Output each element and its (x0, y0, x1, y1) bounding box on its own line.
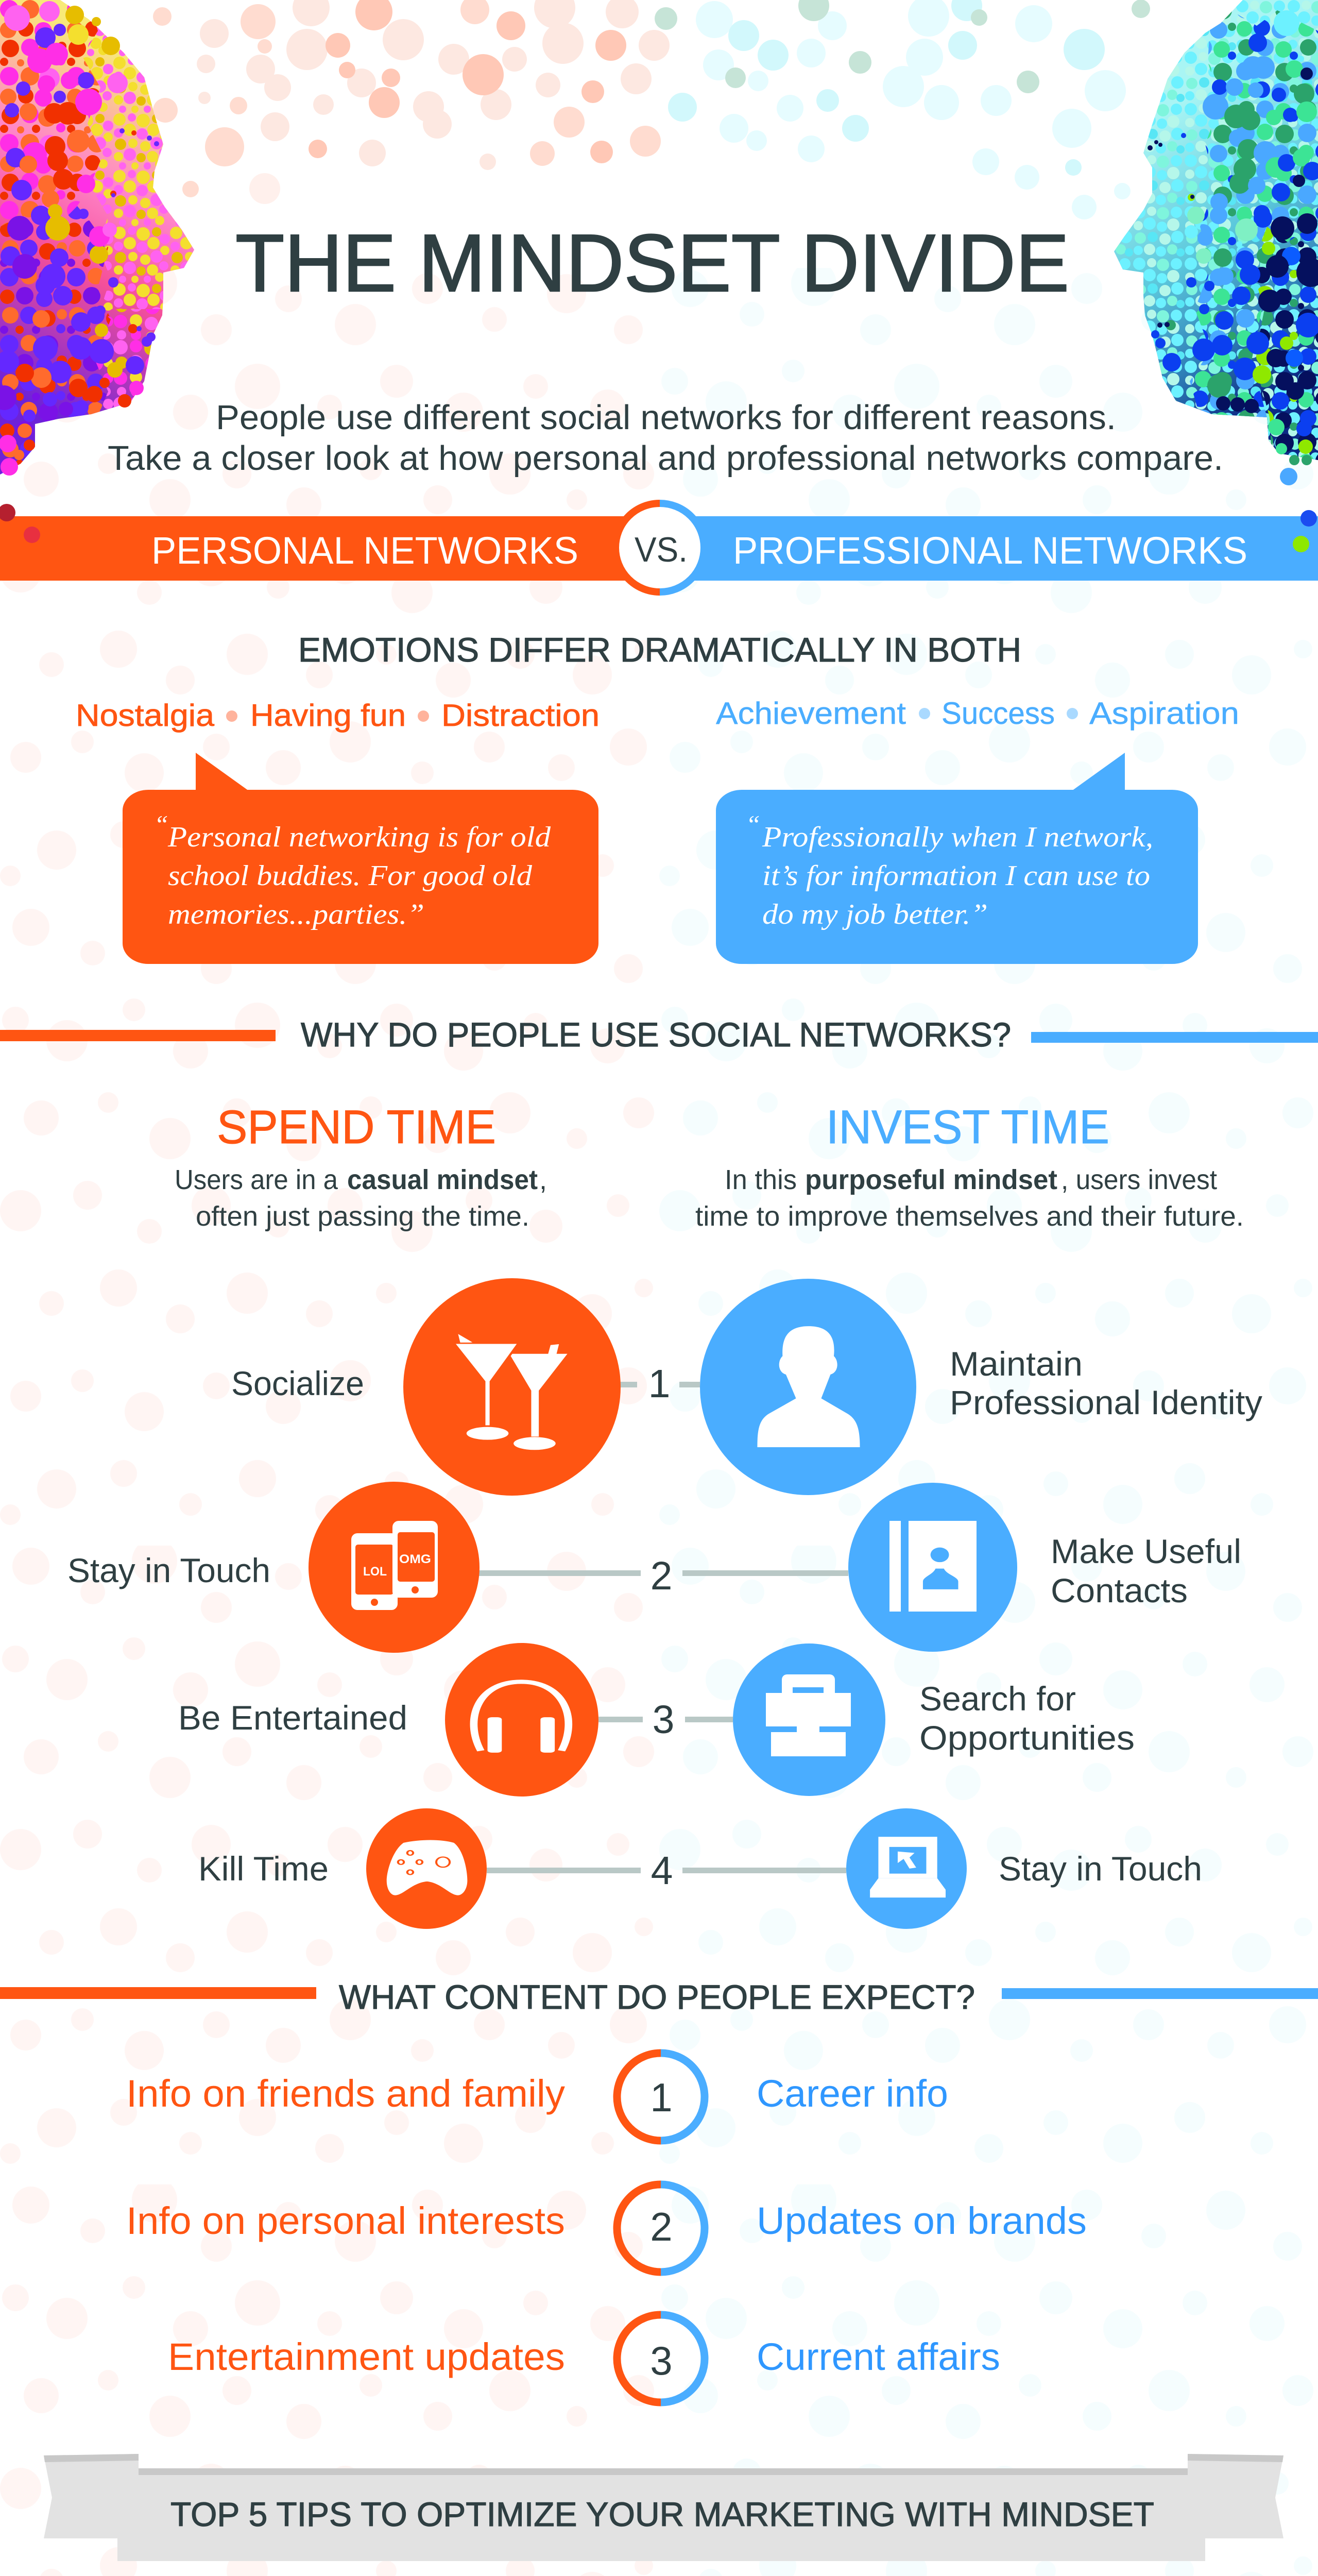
section heading: what content do people expect (0, 1978, 1318, 2016)
invest time description (695, 1164, 1244, 1232)
intro text: People use different social networks for different reasons. (216, 398, 1116, 437)
speech bubble: professional quote: it’s for information I can use to (762, 860, 1150, 892)
row 1: socialize vs professional identity: Professional Identity (950, 1383, 1262, 1421)
content row 2: Info on personal interests (126, 2199, 565, 2242)
row 4: kill time vs stay in touch: 4 (651, 1849, 673, 1893)
row 4: kill time vs stay in touch: Stay in Touch (999, 1850, 1202, 1888)
spend time description: , (539, 1164, 547, 1195)
row 3: be entertained vs search for opportunities: Search for (919, 1680, 1076, 1718)
row 1: socialize vs professional identity: Socialize (231, 1364, 364, 1402)
section heading: why do people use social networks: WHY DO PEOPLE USE SOCIAL NETWORKS? (301, 1015, 1011, 1054)
icon: cocktail glasses (454, 1334, 568, 1450)
row 3: be entertained vs search for opportunities: 3 (653, 1698, 674, 1742)
row 3: be entertained vs search for opportunities (178, 1643, 1135, 1797)
invest time heading: INVEST TIME (826, 1101, 1109, 1154)
top dots: personal side (153, 0, 670, 204)
row 4: kill time vs stay in touch (198, 1808, 1202, 1929)
content row 3 (168, 2315, 1000, 2402)
speech bubble: personal quote: “ (154, 810, 168, 839)
content row 1 (126, 2053, 948, 2141)
content row 2 (126, 2184, 1087, 2272)
professional emotions list (716, 696, 1239, 731)
spend time description (175, 1164, 547, 1232)
section heading: what content do people expect: WHAT CONTENT DO PEOPLE EXPECT? (339, 1978, 975, 2016)
content row 3: Current affairs (757, 2335, 1000, 2378)
title: THE MINDSET DIVIDE (235, 218, 1069, 309)
row 2: stay in touch vs useful contacts: 2 (651, 1554, 672, 1598)
icon: briefcase (766, 1674, 851, 1756)
content row 1: Career info (757, 2072, 948, 2115)
row 1: socialize vs professional identity (231, 1278, 1262, 1496)
professional emotions list: Aspiration (1089, 696, 1239, 731)
icon: laptop (870, 1837, 946, 1897)
intro text (108, 398, 1223, 478)
professional emotions list: Achievement (716, 696, 906, 731)
spend time description: casual mindset (347, 1164, 538, 1195)
speech bubble: personal quote (123, 753, 598, 964)
invest time description: , users invest (1061, 1164, 1217, 1195)
speech bubble: personal quote: memories...parties.” (168, 899, 424, 930)
content row 1: 1 (650, 2075, 673, 2120)
emotions heading: EMOTIONS DIFFER DRAMATICALLY IN BOTH (298, 631, 1021, 669)
content row 3: 3 (650, 2338, 673, 2383)
personal emotions list: Distraction (441, 698, 600, 733)
row 1: socialize vs professional identity: Maintain (950, 1345, 1083, 1383)
right head made of cool dots (1107, 0, 1318, 485)
row 3: be entertained vs search for opportunities: Be Entertained (178, 1699, 407, 1737)
ribbon: top 5 tips heading: TOP 5 TIPS TO OPTIMIZE YOUR MARKETING WITH MINDSET (170, 2495, 1154, 2533)
row 1: socialize vs professional identity: 1 (648, 1362, 670, 1406)
speech bubble: personal quote: Personal networking is for old (167, 821, 551, 853)
row 4: kill time vs stay in touch: Kill Time (198, 1850, 329, 1888)
versus banner (0, 503, 1318, 592)
content row 1: Info on friends and family (126, 2072, 565, 2115)
icon: phones: OMG (399, 1552, 431, 1566)
icon: contact book (889, 1521, 977, 1612)
row 2: stay in touch vs useful contacts: Contacts (1051, 1571, 1188, 1609)
speech bubble: professional quote: Professionally when I network, (762, 821, 1153, 853)
content row 2: Updates on brands (757, 2199, 1087, 2242)
professional emotions list: Success (942, 696, 1055, 731)
spend time description: often just passing the time. (196, 1201, 529, 1232)
content row 3: Entertainment updates (168, 2335, 565, 2378)
icon: phones (351, 1521, 438, 1610)
spend time description: Users are in a (175, 1164, 338, 1195)
left head made of warm dots (0, 0, 194, 476)
icon: person silhouette (757, 1326, 860, 1447)
row 3: be entertained vs search for opportunities: Opportunities (919, 1719, 1135, 1757)
row 2: stay in touch vs useful contacts: Make Useful (1051, 1532, 1241, 1570)
icon: headphones (474, 1682, 569, 1753)
speech bubble: professional quote: do my job better.” (762, 899, 988, 930)
speech bubble: professional quote: “ (746, 810, 760, 839)
icon: game controller (387, 1840, 467, 1895)
speech bubble: personal quote: school buddies. For good old (168, 860, 533, 892)
row 2: stay in touch vs useful contacts (67, 1482, 1241, 1653)
invest time description: time to improve themselves and their future. (695, 1201, 1244, 1232)
content row 2: 2 (650, 2204, 673, 2249)
invest time description: purposeful mindset (805, 1164, 1057, 1195)
ribbon: top 5 tips heading (44, 2454, 1283, 2561)
intro text: Take a closer look at how personal and professional networks compare. (108, 439, 1223, 478)
versus banner: PERSONAL NETWORKS (151, 529, 578, 572)
speech bubble: professional quote (716, 753, 1198, 964)
row 2: stay in touch vs useful contacts: Stay in Touch (67, 1551, 270, 1589)
icon: phones: LOL (363, 1565, 387, 1579)
spend time heading: SPEND TIME (217, 1101, 496, 1154)
invest time description: In this (725, 1164, 797, 1195)
versus banner: PROFESSIONAL NETWORKS (733, 529, 1247, 572)
personal emotions list: Having fun (250, 698, 406, 733)
personal emotions list (76, 698, 600, 733)
section heading: why do people use social networks (0, 1015, 1318, 1054)
versus banner: VS. (635, 530, 688, 569)
personal emotions list: Nostalgia (76, 698, 215, 733)
top dots: professional side (655, 0, 1150, 219)
